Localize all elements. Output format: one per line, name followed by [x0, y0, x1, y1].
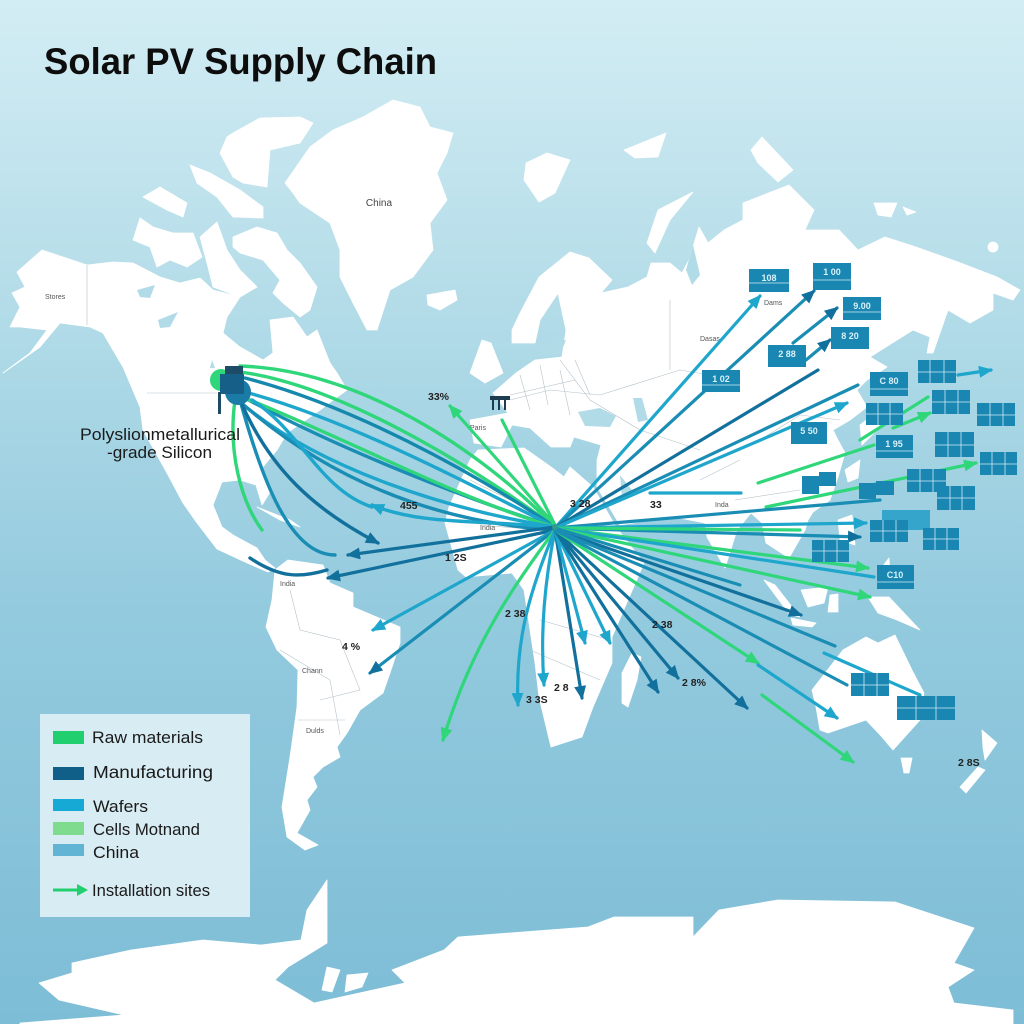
panel: C10 — [887, 570, 903, 580]
icon: Europe plant — [490, 396, 510, 410]
legend: cells: Cells Motnand — [93, 820, 200, 839]
small map labels — [45, 294, 783, 735]
islands — [257, 133, 997, 992]
arrows: west and south from hub — [328, 406, 920, 762]
small map labels: Chann — [302, 668, 323, 675]
percentage labels: 33 — [650, 499, 662, 511]
hub marker — [552, 524, 558, 530]
percentage labels: 2 38 — [652, 619, 673, 631]
legend panel — [40, 714, 250, 917]
percentage labels: 1 2S — [445, 552, 467, 564]
panel — [877, 565, 914, 589]
panel: 5 50 — [800, 426, 818, 436]
landmass: Africa — [445, 448, 644, 747]
landmass: South America — [266, 560, 400, 850]
inland waters — [137, 245, 700, 498]
arrows: north-east and east from hub — [555, 291, 991, 597]
annotation: Polysilicon: Polyslionmetallurical — [80, 425, 240, 444]
landmass: North America — [3, 250, 347, 572]
legend: china: China — [93, 843, 140, 862]
small map labels: Paris — [470, 425, 486, 432]
panel: 1 02 — [712, 374, 730, 384]
faint borders — [87, 265, 840, 735]
legend: wafers: Wafers — [93, 797, 148, 816]
landmass: Antarctica — [20, 880, 1013, 1024]
source marker: North America plant — [210, 366, 251, 414]
landmass: Madagascar — [622, 653, 641, 707]
solar panels: Asia-Pacific — [802, 360, 1017, 720]
panel — [876, 435, 913, 458]
small map labels: Stores — [45, 294, 66, 301]
percentage labels: 2 8 — [554, 682, 569, 694]
percentage labels — [342, 391, 980, 769]
panel — [831, 327, 869, 349]
legend: raw materials: Raw materials — [92, 728, 203, 747]
panel — [749, 269, 789, 292]
panel — [768, 345, 806, 367]
percentage labels: 2 8% — [682, 677, 707, 689]
landmass: Greenland — [285, 100, 453, 330]
landmass: Canadian arctic islands — [133, 117, 317, 317]
panel: 2 88 — [778, 349, 796, 359]
percentage labels: 455 — [400, 500, 418, 512]
panel: 1 00 — [823, 267, 841, 277]
arrows: curved flows from North America — [233, 366, 555, 575]
legend: installation sites: Installation sites — [92, 881, 210, 900]
legend: china — [53, 843, 140, 862]
percentage labels: 3 3S — [526, 694, 548, 706]
legend: manufacturing: Manufacturing — [93, 762, 213, 782]
labelled panels: Asia — [702, 263, 914, 589]
panel: C 80 — [879, 376, 899, 386]
small map labels: Dams — [764, 300, 783, 307]
legend: wafers — [53, 797, 148, 816]
panel: 108 — [761, 273, 777, 283]
percentage labels: 4 % — [342, 641, 361, 653]
panel — [702, 370, 740, 392]
panel — [870, 372, 908, 396]
percentage labels: 2 8S — [958, 757, 980, 769]
panel — [813, 263, 851, 290]
annotation: Polysilicon — [80, 425, 240, 462]
small map labels: Dulds — [306, 728, 324, 735]
landmass: Australia — [812, 635, 924, 750]
small map labels: Dasas — [700, 336, 720, 343]
title: Solar PV Supply Chain — [44, 41, 437, 82]
small map labels: India — [480, 525, 495, 532]
percentage labels: 2 38 — [505, 608, 526, 620]
small map labels: India — [280, 581, 295, 588]
percentage labels: 33% — [428, 391, 450, 403]
small map labels: Inda — [715, 502, 729, 509]
landmass: Eurasia — [470, 185, 1020, 568]
legend: manufacturing — [53, 762, 213, 782]
panel: 9.00 — [853, 301, 871, 311]
panel — [791, 422, 827, 444]
panel: 8 20 — [841, 331, 859, 341]
percentage labels: 3 28 — [570, 498, 591, 510]
panel — [843, 297, 881, 320]
label: China: China — [366, 198, 392, 209]
panel: 1 95 — [885, 439, 903, 449]
annotation: Polysilicon: -grade Silicon — [107, 443, 212, 462]
